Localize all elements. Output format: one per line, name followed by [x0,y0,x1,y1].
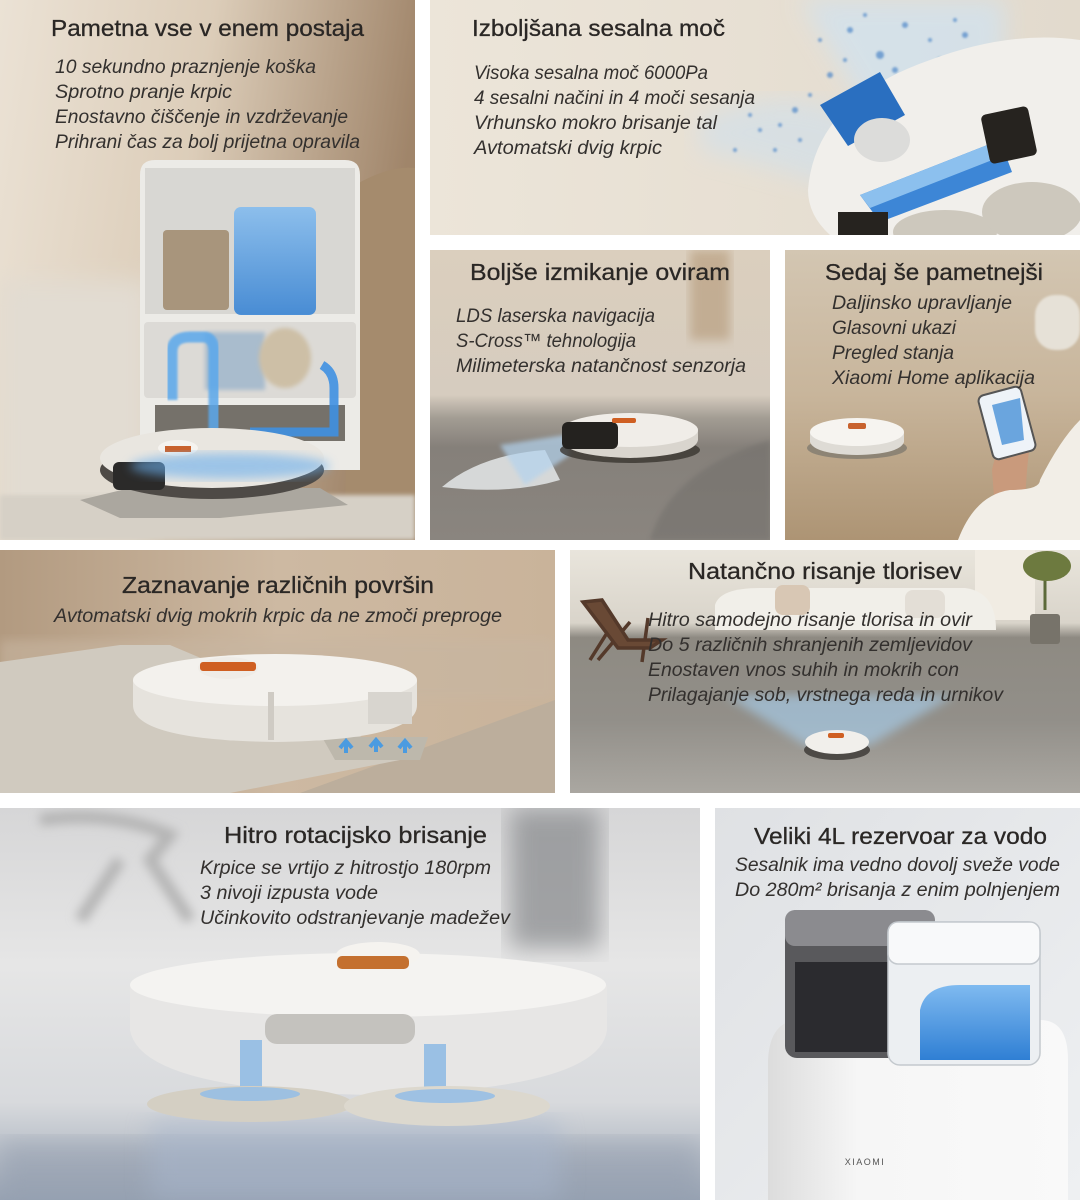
icon: robot vacuum on dock [80,428,348,518]
text block: Vrhunsko mokro brisanje tal [474,113,718,134]
panel: better obstacle avoidance [430,250,770,540]
text block: Avtomatski dvig mokrih krpic da ne zmoči preproge [53,606,502,627]
icon: robot vacuum with lifted mop [133,654,428,760]
text block: Sprotno pranje krpic [55,82,233,103]
text block: Milimeterska natančnost senzorja [456,356,746,377]
icon: robot vacuum [804,730,870,760]
text block: Učinkovito odstranjevanje madežev [200,908,512,929]
text block [648,610,1005,706]
icon: lift arrows [340,740,411,753]
text block [831,293,1035,389]
panel: fast rotary mopping [0,808,700,1200]
text block: Daljinsko upravljanje [832,293,1012,314]
icon: clean water tank [888,922,1040,1065]
panel: 4L water tank [715,808,1080,1200]
icon: lounge chair [583,600,662,662]
heading: Pametna vse v enem postaja [51,15,364,41]
heading: Veliki 4L rezervoar za vodo [754,823,1047,849]
heading: Zaznavanje različnih površin [122,572,434,598]
icon: robot vacuum [807,418,907,459]
text block: S-Cross™ tehnologija [456,331,636,352]
text block: 10 sekundno praznjenje koška [55,57,316,78]
icon: transparent robot vacuum [130,942,607,1126]
text block: Glasovni ukazi [832,318,957,339]
icon: station base: XIAOMI [845,1157,885,1167]
heading: Sedaj še pametnejši [825,259,1043,285]
text block [456,306,746,377]
heading: Izboljšana sesalna moč [472,15,725,41]
panel: improved suction [430,0,1080,254]
text block: Avtomatski dvig krpic [473,138,663,159]
text block: 4 sesalni načini in 4 moči sesanja [474,88,755,109]
text block: Visoka sesalna moč 6000Pa [474,63,708,84]
text block: Do 5 različnih shranjenih zemljevidov [648,635,974,656]
text block [473,63,755,159]
text block: Prihrani čas za bolj prijetna opravila [55,132,360,153]
heading: Natančno risanje tlorisev [688,558,963,584]
panel: smart all-in-one station [0,0,415,540]
icon: sofa [715,585,996,630]
heading: Hitro rotacijsko brisanje [224,822,487,848]
icon: robot vacuum underside [808,38,1080,254]
text block: Pregled stanja [832,343,954,364]
text block: Hitro samodejno risanje tlorisa in ovir [648,610,973,631]
icon: station base [768,1020,1068,1200]
panel: surface detection [0,550,555,793]
text block: Prilagajanje sob, vrstnega reda in urnikov [648,685,1005,706]
icon: slipper obstacle [442,450,560,490]
text block: LDS laserska navigacija [456,306,655,327]
icon: dirty water tank [785,910,935,1058]
text block: Krpice se vrtijo z hitrostjo 180rpm [200,858,491,879]
text block: 3 nivoji izpusta vode [200,883,378,904]
icon: sensor beam [500,435,570,485]
text block [55,57,360,153]
panel: precise floor mapping [570,550,1080,793]
text block: Sesalnik ima vedno dovolj sveže vode [735,855,1060,876]
panel: even smarter [785,250,1080,540]
text block: Enostavno čiščenje in vzdrževanje [55,107,348,128]
icon: hand holding phone [958,385,1080,540]
icon: robot vacuum [560,413,700,463]
icon: potted plant [1023,551,1071,644]
icon: docking station [140,160,360,470]
text block: Do 280m² brisanja z enim polnjenjem [735,880,1060,901]
text block [200,858,512,929]
text block: Enostaven vnos suhih in mokrih con [648,660,959,681]
heading: Boljše izmikanje oviram [470,259,730,285]
text block: Xiaomi Home aplikacija [831,368,1035,389]
text block [735,855,1060,901]
